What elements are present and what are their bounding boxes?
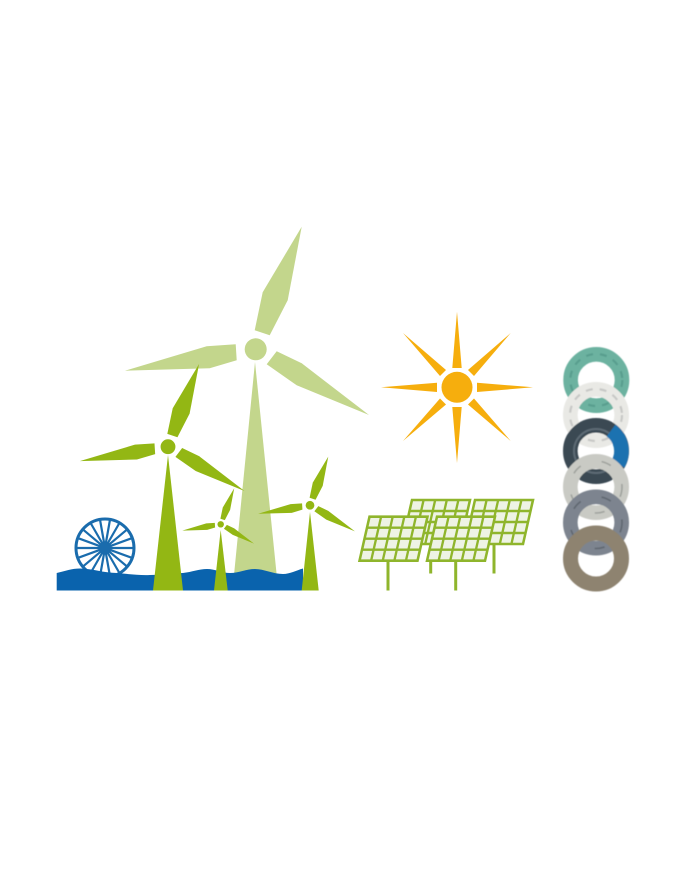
large pale wind turbine [125,227,369,575]
gasket: brown [570,533,622,584]
gasket: slate grey [570,496,622,548]
back right panel [465,500,533,544]
gasket: light grey [570,461,622,513]
water wheel [75,518,135,578]
gasket: dark with blue [570,425,622,477]
back left panel [402,500,470,544]
panel posts [388,544,494,590]
front centre panel [427,517,495,561]
solar panels [360,500,533,590]
icon: sun [381,312,533,463]
gasket rings stack [570,354,622,584]
small wind turbine right [258,457,355,590]
medium wind turbine [80,364,244,590]
water waves [57,568,303,590]
small wind turbine centre [182,488,254,590]
gasket: white [570,389,622,441]
gasket: teal [570,354,622,406]
front left panel [360,517,428,561]
